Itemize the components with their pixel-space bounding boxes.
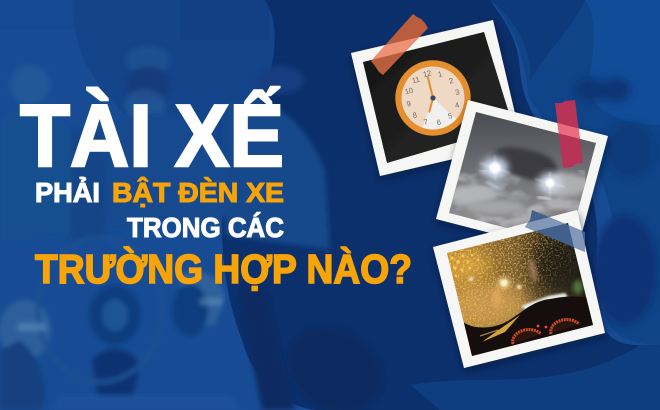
photo: rainy windshield bbox=[433, 210, 605, 370]
heading: BẬT ĐÈN XE: BẬT ĐÈN XE bbox=[112, 177, 284, 208]
heading: PHẢI: PHẢI bbox=[35, 176, 100, 208]
tape: orange bbox=[371, 14, 428, 75]
icon: clock bbox=[395, 60, 471, 136]
icon: clock: 3 bbox=[454, 87, 460, 97]
icon: clock: 9 bbox=[406, 99, 412, 109]
title bbox=[20, 86, 412, 292]
heading: TRƯỜNG HỢP NÀO?: TRƯỜNG HỢP NÀO? bbox=[35, 246, 412, 292]
lower band bbox=[410, 345, 660, 410]
icon: clock: 5 bbox=[447, 111, 453, 121]
lighter band top right bbox=[490, 0, 660, 345]
icon: clock: 1 bbox=[437, 69, 443, 79]
photo: clock bbox=[351, 20, 522, 176]
icon: clock: 2 bbox=[448, 76, 454, 86]
icon: clock: 10 bbox=[404, 86, 414, 96]
tape: blue bbox=[525, 210, 585, 252]
dark organic shape bbox=[222, 0, 660, 410]
tape: red bbox=[555, 100, 583, 168]
heading: TÀI XẾ: TÀI XẾ bbox=[20, 86, 284, 185]
top arc shape bbox=[74, 0, 285, 190]
dashboard bbox=[464, 296, 593, 356]
icon: clock: 11 bbox=[411, 75, 421, 85]
photo: headlights in fog bbox=[436, 100, 608, 255]
icon: clock: 12 bbox=[422, 68, 432, 79]
heading: TRONG CÁC: TRONG CÁC bbox=[127, 212, 284, 243]
icon: clock: 6 bbox=[436, 117, 442, 127]
icon: clock: 8 bbox=[412, 110, 418, 120]
icon: clock: 7 bbox=[423, 117, 429, 127]
icon: clock: 4 bbox=[454, 100, 460, 110]
